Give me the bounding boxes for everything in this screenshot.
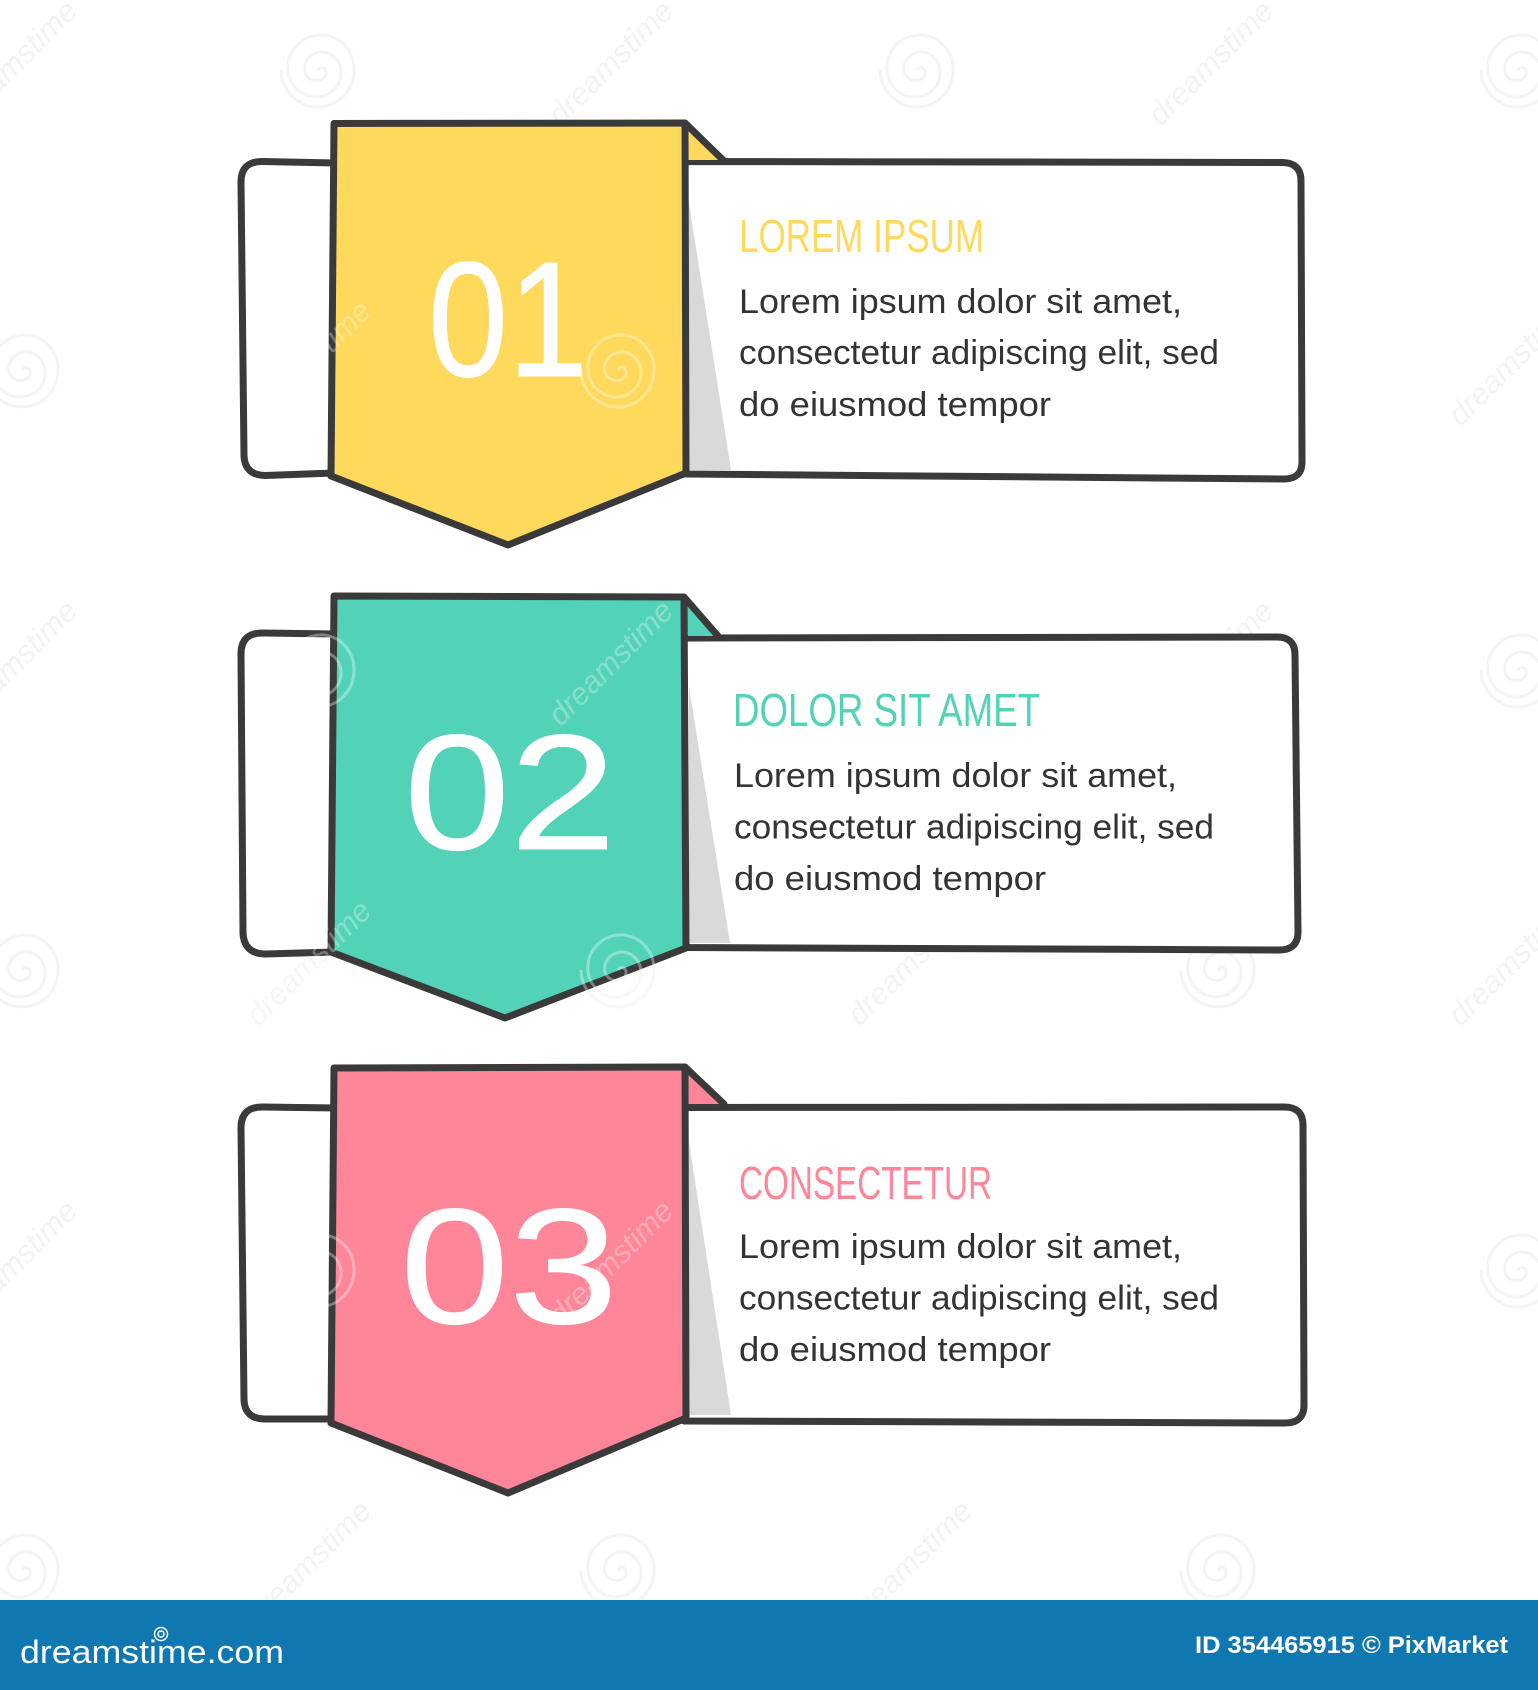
ribbon bbox=[331, 123, 686, 545]
background watermarks: dreamstime bbox=[840, 293, 979, 432]
body text: consectetur adipiscing elit, sed bbox=[739, 334, 1219, 372]
body text: do eiusmod tempor bbox=[739, 1331, 1051, 1369]
content box bbox=[684, 1107, 1304, 1423]
overlay watermarks: dreamstime bbox=[239, 293, 378, 432]
image credit: ID 354465915 © PixMarket bbox=[1195, 1632, 1508, 1659]
left tab bbox=[241, 1107, 336, 1419]
heading: DOLOR SIT AMET bbox=[733, 684, 1040, 736]
overlay watermarks: dreamstime bbox=[541, 593, 680, 732]
body text: Lorem ipsum dolor sit amet, bbox=[734, 757, 1177, 795]
body text: Lorem ipsum dolor sit amet, bbox=[739, 1228, 1182, 1266]
body text: Lorem ipsum dolor sit amet, bbox=[739, 283, 1182, 321]
body text: consectetur adipiscing elit, sed bbox=[734, 808, 1214, 846]
logo icon bbox=[154, 1628, 168, 1640]
background watermarks: dreamstime bbox=[1141, 593, 1280, 732]
left tab bbox=[241, 162, 336, 476]
panel: step 01 bbox=[241, 123, 1302, 545]
body text bbox=[739, 1228, 1219, 1369]
panel: step 03 bbox=[241, 1067, 1304, 1493]
ribbon fold bbox=[684, 597, 718, 636]
body text: do eiusmod tempor bbox=[739, 386, 1051, 424]
content box bbox=[684, 162, 1302, 479]
body text: consectetur adipiscing elit, sed bbox=[739, 1280, 1219, 1318]
overlay watermarks: dreamstime bbox=[239, 893, 378, 1032]
fold edge bbox=[685, 1067, 724, 1104]
ribbon fold bbox=[685, 1067, 724, 1104]
ribbon fold bbox=[685, 123, 723, 160]
body text bbox=[734, 757, 1214, 898]
ribbon bbox=[331, 596, 686, 1018]
background watermarks: dreamstime bbox=[239, 893, 378, 1032]
fold shadow bbox=[689, 687, 730, 943]
overlay watermarks: dreamstime bbox=[541, 1193, 680, 1332]
background watermarks: dreamstime bbox=[239, 1493, 378, 1632]
fold shadow bbox=[688, 197, 731, 470]
fold edge bbox=[685, 123, 723, 160]
ribbon bbox=[331, 1067, 686, 1493]
background watermarks: dreamstime bbox=[840, 1493, 979, 1632]
number 02: 02 bbox=[404, 701, 616, 884]
background watermarks: dreamstime bbox=[239, 293, 378, 432]
background watermarks: dreamstime bbox=[840, 893, 979, 1032]
left tab bbox=[241, 633, 336, 954]
footer bar bbox=[0, 1600, 1538, 1690]
logo text: dreamstime.com bbox=[20, 1634, 284, 1670]
panel: step 02 bbox=[241, 596, 1298, 1018]
body text: do eiusmod tempor bbox=[734, 860, 1046, 898]
overlay watermarks bbox=[239, 293, 680, 1332]
number 01: 01 bbox=[428, 228, 588, 411]
content box bbox=[684, 637, 1298, 950]
fold shadow bbox=[689, 1142, 731, 1415]
background watermarks: dreamstime bbox=[1141, 1193, 1280, 1332]
number 03: 03 bbox=[400, 1175, 618, 1358]
heading: CONSECTETUR bbox=[739, 1157, 992, 1209]
body text bbox=[739, 283, 1219, 424]
heading: LOREM IPSUM bbox=[739, 210, 984, 262]
fold edge bbox=[684, 597, 718, 636]
